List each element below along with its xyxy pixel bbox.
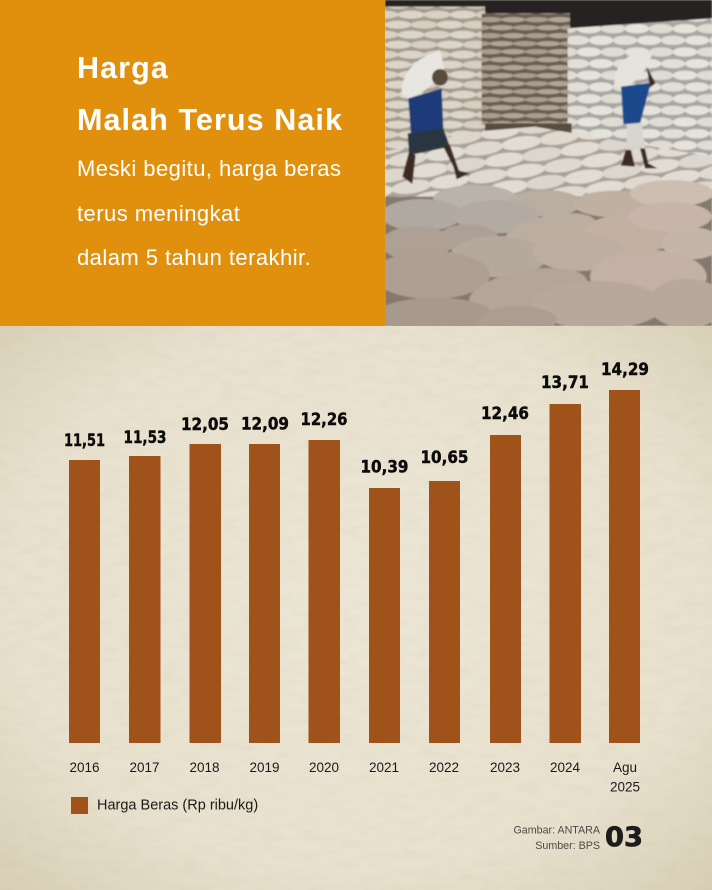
value labels: 12,46: [481, 404, 529, 423]
value labels: 11,51: [64, 431, 105, 450]
axis labels: Agu: [613, 760, 637, 775]
worker right: [614, 48, 658, 168]
photo: workers carrying rice sacks in a warehouse: [385, 0, 712, 326]
bars: [69, 390, 640, 743]
value labels: 10,65: [420, 448, 468, 467]
axis labels: 2016: [69, 760, 100, 775]
axis labels: 2020: [309, 760, 339, 775]
axis labels: 2024: [550, 760, 581, 775]
body text line 3: dalam 5 tahun terakhir.: [77, 245, 311, 270]
heading line 1: Harga: [77, 51, 169, 85]
panel: orange headline: [0, 0, 385, 326]
sack stacks: [385, 7, 712, 173]
page number: 03: [605, 822, 643, 853]
warehouse back wall: [385, 0, 712, 326]
floor of sacks: [373, 127, 712, 334]
value labels: 13,71: [541, 373, 589, 392]
body text line 2: terus meningkat: [77, 201, 240, 226]
axis labels: 2021: [369, 760, 399, 775]
axis labels: 2017: [129, 760, 160, 775]
value labels: 11,53: [124, 428, 166, 447]
heading line 2: Malah Terus Naik: [77, 103, 343, 137]
source credits: [513, 824, 601, 852]
bar chart: harga beras: [64, 360, 649, 853]
worker left: [402, 50, 470, 184]
axis labels: 2019: [249, 760, 280, 775]
value labels: [64, 360, 649, 476]
axis labels: 2018: [189, 760, 220, 775]
source credits: Sumber: BPS: [535, 840, 600, 852]
axis labels: [69, 760, 640, 794]
value labels: 12,26: [300, 410, 348, 429]
source credits: Gambar: ANTARA: [513, 824, 601, 836]
axis labels: 2023: [490, 760, 520, 775]
axis labels: 2022: [429, 760, 459, 775]
value labels: 12,05: [181, 415, 229, 434]
value labels: 12,09: [241, 414, 289, 434]
axis labels: 2025: [610, 780, 640, 794]
body text line 1: Meski begitu, harga beras: [77, 156, 341, 181]
value labels: 10,39: [360, 458, 408, 476]
value labels: 14,29: [601, 360, 649, 379]
legend: Harga Beras (Rp ribu/kg): [97, 798, 258, 814]
